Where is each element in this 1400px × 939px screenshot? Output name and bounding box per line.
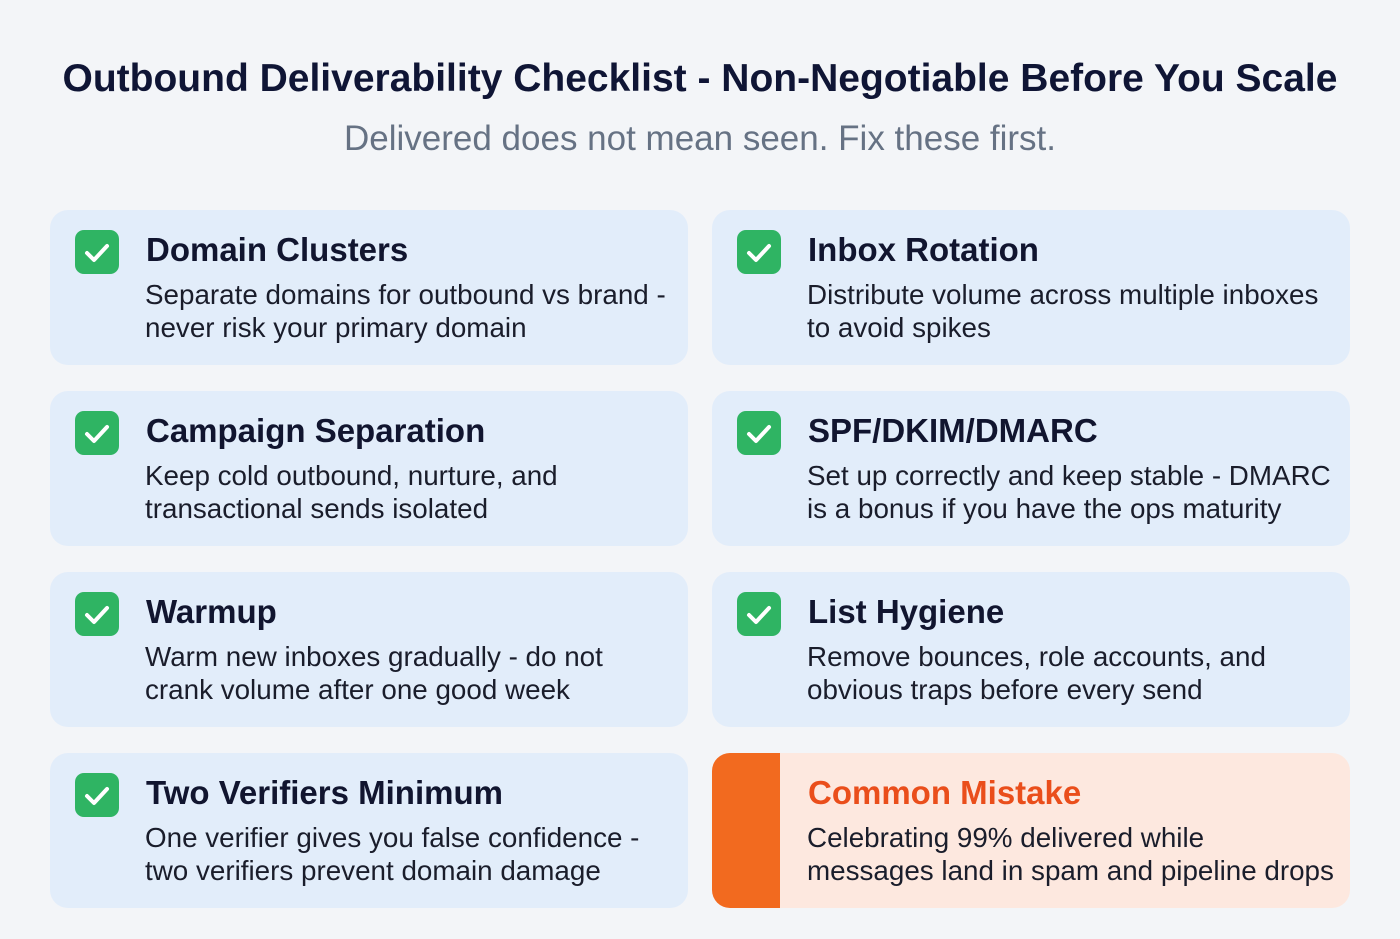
icon: check: [75, 773, 119, 817]
text: two verifiers prevent domain damage: [145, 855, 601, 886]
text: transactional sends isolated: [145, 493, 488, 524]
card: common mistake: [712, 753, 1350, 908]
text: [807, 460, 1331, 524]
text: Set up correctly and keep stable - DMARC: [807, 460, 1331, 491]
heading: Two Verifiers Minimum: [146, 774, 503, 811]
text: crank volume after one good week: [145, 674, 570, 705]
text: [807, 641, 1266, 705]
subtitle: Delivered does not mean seen. Fix these first.: [344, 119, 1056, 158]
card: campaign separation: [50, 391, 688, 546]
text: One verifier gives you false confidence -: [145, 822, 639, 853]
text: [807, 279, 1318, 343]
text: Warm new inboxes gradually - do not: [145, 641, 603, 672]
icon: check: [737, 230, 781, 274]
text: Celebrating 99% delivered while: [807, 822, 1204, 853]
orange stripe: [712, 753, 780, 908]
card: domain clusters: [50, 210, 688, 365]
text: [145, 460, 558, 524]
icon: check: [75, 592, 119, 636]
text: [807, 822, 1334, 886]
heading: Common Mistake: [808, 774, 1081, 811]
text: [145, 822, 639, 886]
text: messages land in spam and pipeline drops: [807, 855, 1334, 886]
icon: check: [737, 411, 781, 455]
card: two verifiers: [50, 753, 688, 908]
text: Remove bounces, role accounts, and: [807, 641, 1266, 672]
text: is a bonus if you have the ops maturity: [807, 493, 1281, 524]
card: inbox rotation: [712, 210, 1350, 365]
heading: Domain Clusters: [146, 231, 408, 268]
heading: Campaign Separation: [146, 412, 485, 449]
card: warmup: [50, 572, 688, 727]
heading: Inbox Rotation: [808, 231, 1039, 268]
icon: check: [737, 592, 781, 636]
text: Separate domains for outbound vs brand -: [145, 279, 666, 310]
heading: Warmup: [146, 593, 277, 630]
text: obvious traps before every send: [807, 674, 1203, 705]
text: Keep cold outbound, nurture, and: [145, 460, 558, 491]
heading: List Hygiene: [808, 593, 1004, 630]
heading: SPF/DKIM/DMARC: [808, 412, 1098, 449]
text: to avoid spikes: [807, 312, 991, 343]
title: Outbound Deliverability Checklist - Non-Negotiable Before You Scale: [63, 57, 1337, 100]
text: Distribute volume across multiple inboxes: [807, 279, 1318, 310]
card: list hygiene: [712, 572, 1350, 727]
text: never risk your primary domain: [145, 312, 527, 343]
icon: check: [75, 230, 119, 274]
card: spf dkim dmarc: [712, 391, 1350, 546]
icon: check: [75, 411, 119, 455]
text: [145, 641, 603, 705]
text: [145, 279, 666, 343]
